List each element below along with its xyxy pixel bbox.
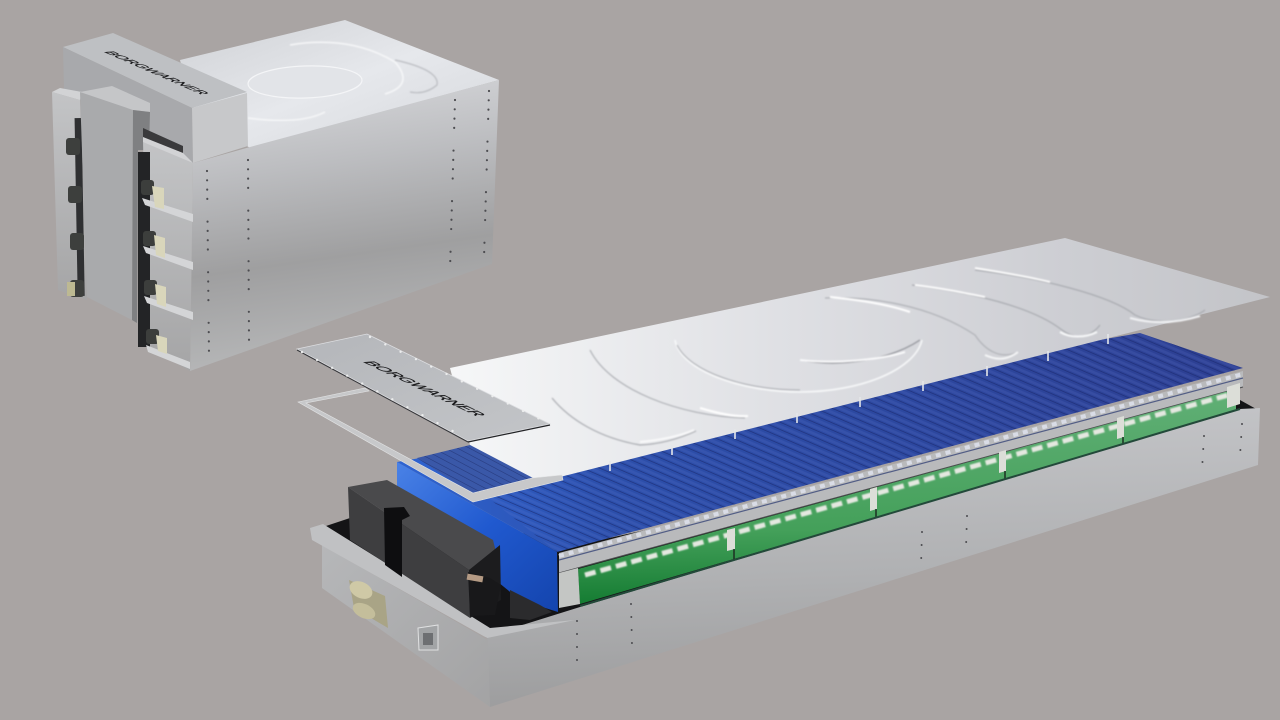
lid mounting pins — [610, 334, 1108, 471]
central front cover — [80, 86, 150, 323]
exploded battery pack — [297, 238, 1270, 707]
closed unit lid with swirl embossing — [180, 20, 499, 148]
cutout showing cells — [417, 445, 533, 497]
left terminal module — [52, 88, 87, 300]
logo on closed unit: BORGWARNER — [101, 50, 211, 95]
rivet columns on side panel — [207, 91, 489, 355]
board connectors — [585, 394, 1232, 575]
green circuit boards — [559, 383, 1240, 608]
cell stack blue side — [397, 462, 558, 612]
black power module — [348, 480, 552, 620]
left board modules — [559, 568, 580, 608]
closed unit long side panel — [190, 80, 499, 371]
top lid with swirl embossing — [450, 238, 1270, 480]
tray long side wall — [487, 408, 1260, 707]
upper shelf slot — [143, 128, 183, 153]
logo on cover plate: BORGWARNER — [360, 360, 489, 417]
lid swirl contours — [552, 268, 1205, 445]
logo cover plate — [297, 334, 550, 442]
left terminals — [66, 138, 84, 297]
upper logo housing — [63, 33, 248, 163]
cable duct — [138, 152, 150, 347]
cable duct — [75, 118, 85, 296]
busbar strip with cell tabs — [559, 371, 1243, 573]
plate rivets — [302, 337, 548, 438]
cell stack blue top — [397, 333, 1243, 552]
clamp connectors — [141, 180, 167, 354]
board dividers — [727, 383, 1240, 551]
small service connector — [418, 625, 438, 650]
gasket frame — [298, 388, 563, 502]
shelves — [142, 198, 193, 369]
right terminal module — [138, 128, 193, 371]
rivets on long wall — [577, 424, 1242, 662]
tray interior — [323, 400, 1258, 640]
closed battery unit — [52, 20, 499, 371]
brass connector — [347, 578, 388, 628]
tray short end wall — [310, 524, 575, 707]
